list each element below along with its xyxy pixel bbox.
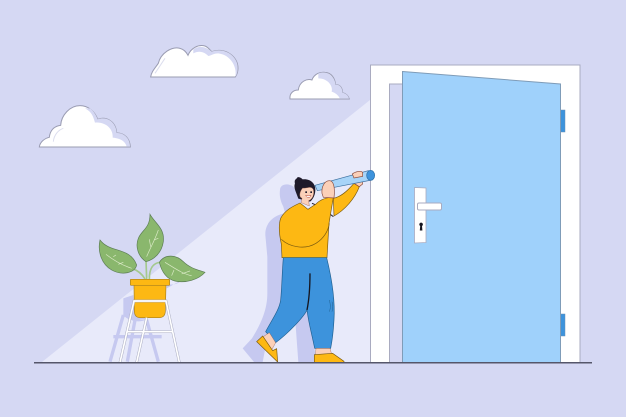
telescope (315, 170, 375, 191)
plant shadow (110, 280, 182, 362)
raised far arm (333, 183, 359, 216)
figure shadow on wall (243, 184, 316, 362)
hair back (294, 177, 315, 202)
knee creases (329, 300, 333, 312)
icon: cloud left (39, 106, 130, 147)
icon: door handle (414, 188, 442, 243)
trousers (266, 258, 334, 348)
hair bun (295, 178, 303, 186)
far hand fingers (352, 171, 363, 178)
plant (99, 214, 205, 362)
icon: keyhole (419, 223, 423, 230)
panel: door frame (370, 65, 580, 363)
pot (134, 285, 166, 318)
stand (120, 301, 179, 362)
sweater (279, 197, 333, 258)
back ankle (263, 333, 276, 350)
near hand (322, 181, 334, 198)
stems (132, 260, 160, 279)
sweater arm crease (281, 223, 329, 247)
icon: cloud right (290, 72, 349, 99)
neck strap (312, 203, 333, 217)
panel: door opening (390, 84, 410, 363)
near shoe (314, 353, 344, 363)
leaf right (159, 256, 205, 282)
face (300, 187, 314, 206)
panel: light beam from door (42, 100, 370, 362)
leaf left (99, 240, 137, 273)
near ankle (315, 348, 332, 355)
far wrist (353, 177, 363, 187)
icon: cloud top (151, 46, 238, 77)
mouth (306, 195, 311, 197)
trouser fold (307, 273, 310, 310)
ground line (34, 362, 592, 364)
pot rim (130, 279, 170, 285)
icon: upper hinge (560, 110, 565, 132)
panel: open door leaf (402, 72, 560, 363)
leaf middle (137, 214, 164, 262)
icon: lower hinge (560, 314, 565, 336)
eyes (305, 191, 312, 193)
back shoe (257, 336, 278, 362)
person (243, 170, 375, 363)
